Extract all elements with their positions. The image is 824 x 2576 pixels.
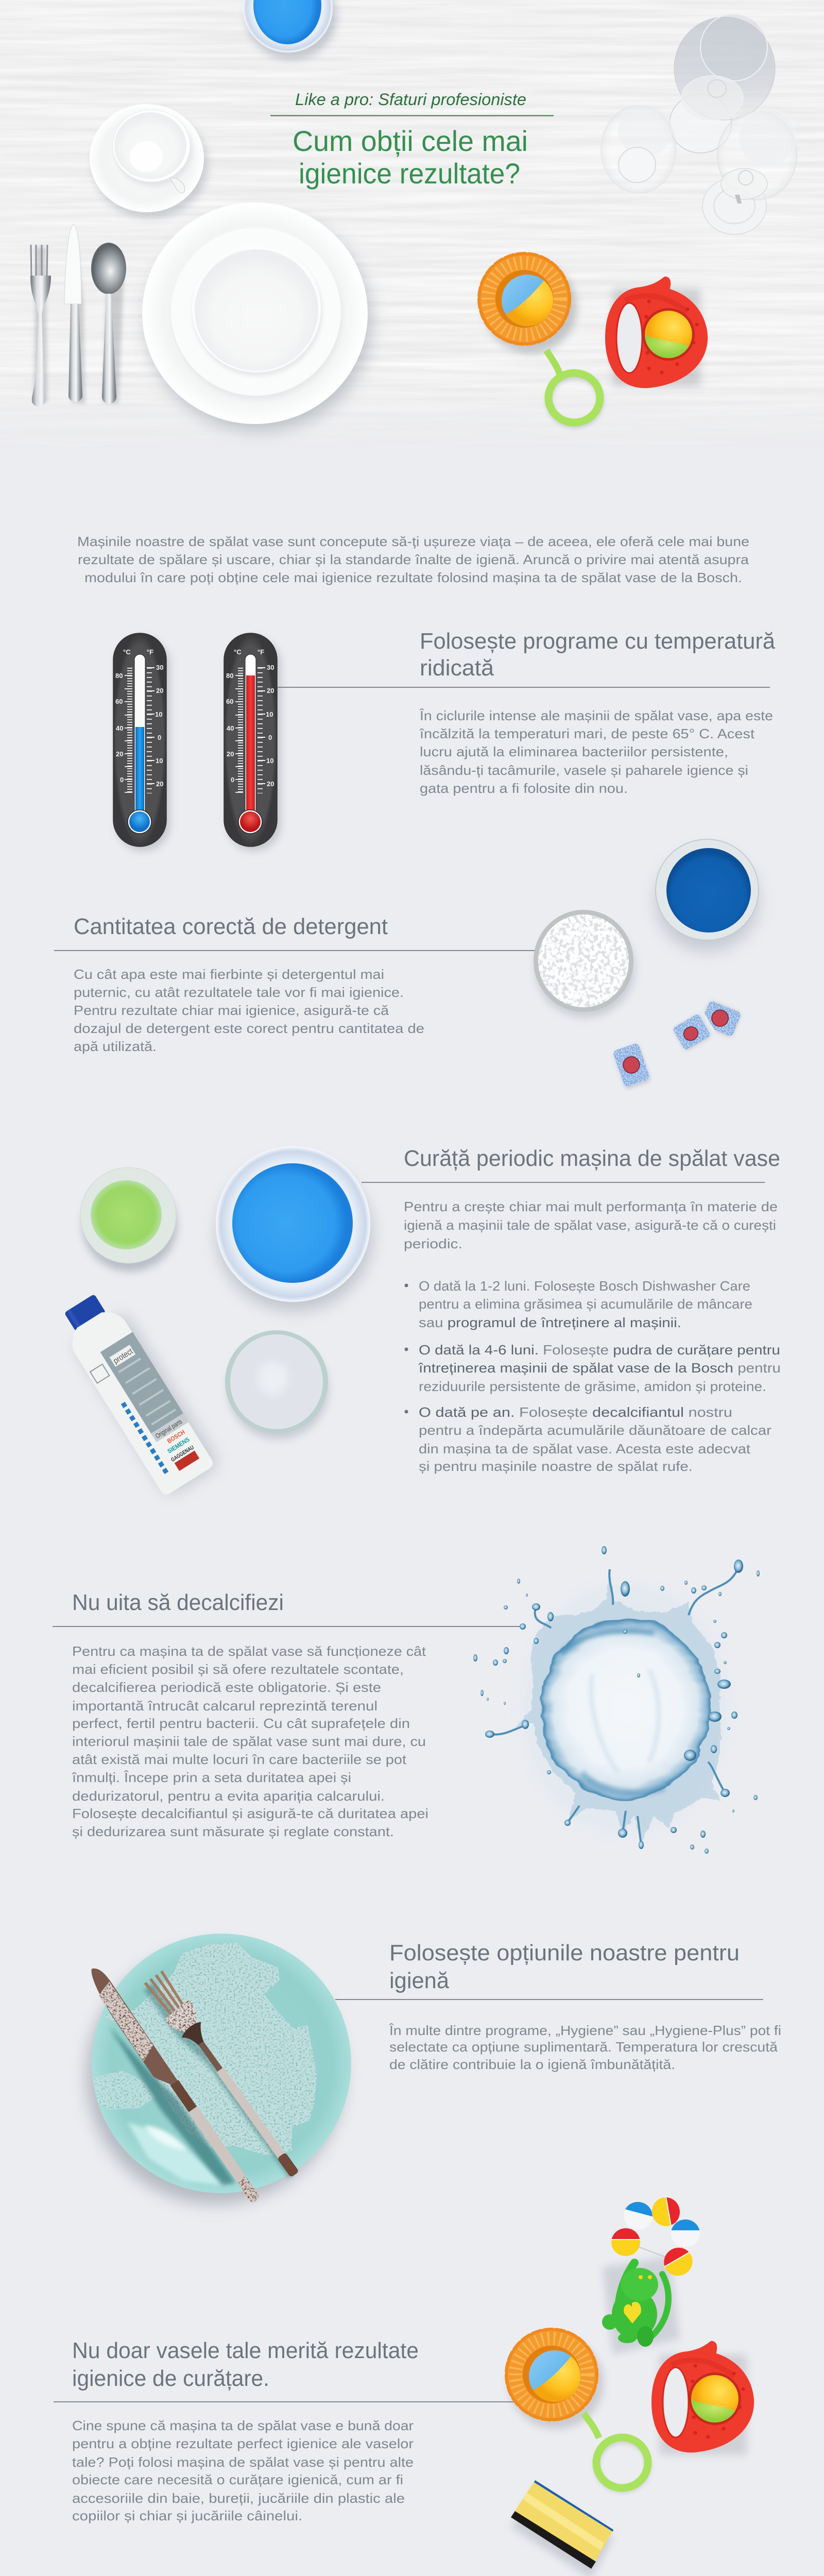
intro text: modului în care poți obține cele mai igienice rezultate folosind mașina ta de spălat vase de la Bosch.	[84, 570, 742, 585]
main title: Cum obții cele mai	[293, 125, 528, 157]
icon: cleaner bottle: BOSCH	[166, 1428, 186, 1445]
body text: Folosește decalcifiantul și asigură-te că duritatea apei	[72, 1806, 428, 1821]
heading: igienice de curățare.	[72, 2366, 269, 2391]
icon: powder dish	[225, 1330, 329, 1439]
body text: dedurizatorul, pentru a evita apariția calcarului.	[72, 1788, 385, 1804]
body text: lăsându-ți tacâmurile, vasele și paharele igience și	[420, 762, 748, 778]
subtitle: Like a pro: Sfaturi profesioniste	[295, 90, 526, 109]
icon: cleaner bottle	[54, 1286, 219, 1498]
panel: not only dishes	[54, 2194, 754, 2576]
bullet: 4-6 months: O dată la 4-6 luni. Folosește pudra de curățare pentru	[419, 1342, 780, 1358]
icon: cold thermometer: 20	[156, 780, 163, 788]
monkey	[602, 2263, 668, 2347]
icon: cold thermometer: 20	[116, 750, 123, 758]
icon: monkey toy with beads	[602, 2194, 701, 2354]
panel: descaling	[53, 1546, 760, 1854]
icon: cold thermometer: 10	[155, 710, 162, 718]
heading: Cantitatea corectă de detergent	[74, 914, 388, 939]
icon: detergent tablets	[612, 1000, 742, 1090]
icon: glassware	[601, 14, 797, 234]
icon: cup and saucer	[90, 104, 208, 218]
body text: dozajul de detergent este corect pentru cantitatea de	[74, 1021, 424, 1036]
icon: cold thermometer: 0	[158, 734, 161, 741]
icon: cold thermometer: 10	[156, 757, 163, 765]
panel: high temperature programs	[113, 629, 776, 851]
body text: atât există mai multe locuri în care bacteriile se pot	[72, 1752, 407, 1767]
body text: încălzită la temperaturi mari, de peste 65° C. Acest	[419, 726, 755, 741]
body text: lucru ajută la eliminarea bacteriilor persistente,	[420, 744, 728, 759]
beads	[610, 2194, 701, 2284]
body text: igienă a mașinii tale de spălat vase, asigură-te că o curești	[404, 1217, 776, 1233]
heading: Folosește programe cu temperatură	[420, 629, 776, 654]
icon: hot thermometer: 40	[227, 724, 234, 732]
bullet: 4-6 months	[405, 1342, 781, 1394]
title block: igienice rezultate?	[299, 157, 520, 190]
bottle body	[64, 1304, 215, 1497]
icon: cleaner bottle: Original parts	[154, 1417, 183, 1440]
bottle label	[100, 1332, 186, 1438]
fork	[141, 1968, 308, 2183]
wine glass one	[670, 14, 775, 153]
icon: cold thermometer: 20	[156, 687, 163, 694]
icon: cold thermometer: 0	[120, 776, 124, 784]
body text: înmulți. Începe prin a seta duritatea apei și	[72, 1770, 351, 1785]
icon: bowl of powder salt	[534, 910, 635, 1018]
body text: gata pentru a fi folosite din nou.	[420, 781, 628, 796]
body text: Cine spune că mașina ta de spălat vase e bună doar	[72, 2418, 414, 2433]
bottle cap	[64, 1294, 106, 1332]
icon: teal plate with foam and cutlery	[72, 1934, 351, 2216]
heading: ridicată	[420, 655, 494, 681]
bullet: 1-2 months: sau programul de întreținere al mașinii.	[419, 1315, 681, 1330]
bullet: once a year	[405, 1404, 771, 1474]
body text: decalcifierea periodică este obligatorie. Și este	[72, 1680, 381, 1695]
tablet single	[612, 1043, 651, 1090]
bullet: once a year: și pentru mașinile noastre de spălat rufe.	[419, 1459, 693, 1474]
icon: cold thermometer: °F	[147, 648, 153, 656]
icon: fork	[30, 245, 51, 406]
bullet: 4-6 months: întreținerea mașinii de spălat vase de la Bosch pentru	[418, 1360, 781, 1376]
icon: cold thermometer: 60	[115, 698, 123, 705]
icon: rattle strawberry header	[605, 277, 708, 388]
body text: importantă întrucât calcarul reprezintă terenul	[72, 1698, 377, 1714]
heading	[72, 2338, 419, 2391]
intro text: Mașinile noastre de spălat vase sunt concepute să-ți ușureze viața – de aceea, ele oferă cele mai bune	[77, 534, 749, 549]
icon: hot thermometer: 0	[268, 734, 272, 741]
body text	[72, 2418, 414, 2523]
icon: cold thermometer: 40	[116, 724, 123, 732]
icon: cold thermometer	[113, 633, 170, 851]
title block	[270, 90, 554, 190]
bullet: once a year: din mașina ta de spălat vase. Acesta este adecvat	[419, 1441, 751, 1456]
knife	[72, 1964, 261, 2216]
foam left	[93, 2071, 156, 2110]
body text: puternic, cu atât rezultatele tale vor fi mai igienice.	[74, 985, 404, 1000]
body text: perfect, fertil pentru bacterii. Cu cât suprafețele din	[72, 1716, 410, 1731]
icon: hot thermometer: 60	[226, 698, 233, 705]
body text: pentru a obține rezultate perfect igienice ale vaselor	[72, 2436, 414, 2451]
body text: În multe dintre programe, „Hygiene” sau „Hygiene-Plus” pot fi	[389, 2023, 781, 2038]
icon: hot thermometer: 80	[226, 672, 233, 680]
icon: large blue liquid plate	[216, 1146, 372, 1311]
body text: accesoriile din baie, bureții, jucăriile din plastic ale	[72, 2490, 405, 2506]
icon: sunflower rattle	[507, 2330, 648, 2490]
icon: hot thermometer: 0	[231, 776, 234, 784]
body text: selectate ca opțiune suplimentară. Temperatura lor crescută	[389, 2039, 778, 2055]
body text	[419, 708, 773, 796]
icon: spoon	[91, 243, 126, 404]
icon: hot thermometer	[224, 633, 281, 851]
intro text	[77, 534, 749, 585]
header: wooden table background	[0, 0, 824, 398]
icon: hot thermometer: 20	[227, 750, 234, 758]
icon: hot thermometer: 10	[266, 710, 273, 718]
body text: În ciclurile intense ale mașinii de spălat vase, apa este	[419, 708, 773, 723]
body text: Pentru rezultate chiar mai igienice, asigură-te că	[74, 1003, 389, 1018]
icon: hot thermometer: °C	[234, 648, 242, 656]
icon: hot thermometer: 10	[266, 757, 273, 765]
bullet: 1-2 months: pentru a elimina grăsimea și acumulările de mâncare	[419, 1296, 752, 1312]
body text: și dedurizarea sunt măsurate și reglate constant.	[72, 1824, 394, 1839]
bullet: 1-2 months	[405, 1278, 752, 1330]
body text: periodic.	[404, 1236, 462, 1251]
heading: Folosește opțiunile noastre pentru	[389, 1940, 740, 1965]
bullet: 4-6 months: reziduurile persistente de grăsime, amidon și proteine.	[419, 1379, 766, 1394]
icon: hot thermometer: 20	[267, 780, 274, 788]
heading	[389, 1940, 740, 1993]
icon: green gel dish	[80, 1167, 177, 1272]
body text	[389, 2023, 781, 2072]
icon: rattle sunflower header	[480, 255, 600, 425]
heading: Nu doar vasele tale merită rezultate	[72, 2338, 419, 2363]
heading: igienă	[389, 1968, 450, 1993]
icon: hot thermometer: 20	[267, 687, 274, 694]
body text: tale? Poți folosi mașina de spălat vase și pentru alte	[72, 2454, 414, 2470]
icon: cleaner bottle: GAGGENAU	[170, 1444, 195, 1463]
icon: cleaner bottle: protect	[112, 1347, 134, 1366]
body text: Cu cât apa este mai fierbinte și detergentul mai	[74, 967, 384, 982]
body text: Pentru ca mașina ta de spălat vase să funcționeze cât	[72, 1643, 426, 1659]
foam main	[103, 1943, 317, 2156]
bullet: 1-2 months: O dată la 1-2 luni. Folosește Bosch Dishwasher Care	[419, 1278, 750, 1294]
wine glass two	[702, 109, 797, 234]
droplets	[473, 1546, 760, 1854]
icon: knife	[64, 224, 85, 404]
tablet double	[672, 1000, 742, 1052]
icon: cold thermometer: °C	[123, 648, 131, 656]
body text: mai eficient posibil și să ofere rezultatele scontate,	[72, 1662, 404, 1677]
body text: apă utilizată.	[74, 1039, 157, 1054]
icon: sponge	[511, 2480, 613, 2576]
heading: Curăță periodic mașina de spălat vase	[404, 1146, 780, 1171]
body text: copiilor și chiar și jucăriile câinelui.	[72, 2508, 302, 2523]
panel: hygiene options	[72, 1934, 781, 2216]
icon: strawberry rattle	[651, 2341, 754, 2455]
bullet: once a year: O dată pe an. Folosește decalcifiantul nostru	[419, 1404, 732, 1420]
tumbler	[601, 105, 676, 193]
body text: de clătire contribuie la o igienă îmbunătățită.	[389, 2057, 675, 2072]
icon: blue bowl top	[243, 0, 337, 60]
body text: interiorul mașinii tale de spălat vase sunt mai dure, cu	[72, 1734, 426, 1749]
body text: obiecte care necesită o curățare igienică, cum ar fi	[72, 2472, 403, 2487]
panel: correct detergent amount	[54, 839, 759, 1090]
icon: water splash crown	[473, 1546, 760, 1854]
body text	[404, 1199, 778, 1251]
dots	[123, 1403, 168, 1476]
body text	[72, 1643, 428, 1839]
icon: cold thermometer: 30	[156, 664, 163, 671]
icon: bowl of blue detergent	[656, 839, 759, 951]
icon: stacked white plates	[142, 202, 372, 431]
splash tendrils	[490, 1567, 739, 1845]
body text: Pentru a crește chiar mai mult performanța în materie de	[404, 1199, 778, 1214]
heading: Nu uita să decalcifiezi	[72, 1590, 284, 1615]
panel: clean the dishwasher periodically	[54, 1146, 781, 1498]
icon: cold thermometer: 80	[115, 672, 123, 680]
heading	[420, 629, 776, 681]
intro text: rezultate de spălare și uscare, chiar și la standarde înalte de igienă. Aruncă o privire mai atentă asupra	[78, 552, 749, 567]
icon: cleaner bottle: SIEMENS	[166, 1436, 191, 1455]
bullet: once a year: pentru a îndepărta acumulările dăunătoare de calcar	[419, 1422, 771, 1438]
icon: hot thermometer: 30	[267, 664, 274, 671]
body text	[74, 967, 424, 1054]
icon: hot thermometer: °F	[258, 648, 264, 656]
